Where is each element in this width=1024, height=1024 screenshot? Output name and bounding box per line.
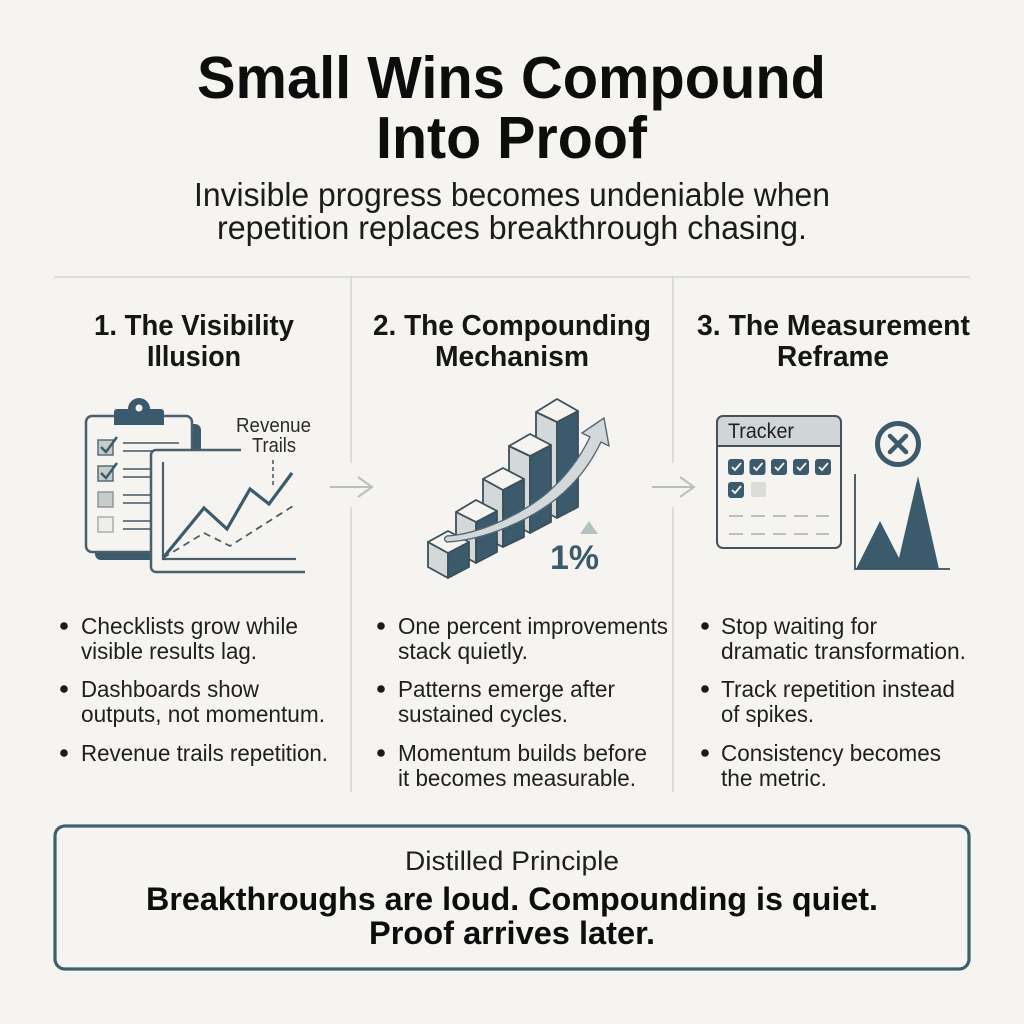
callout: distilled principle: Proof arrives later. (369, 915, 655, 951)
chart: spikes (855, 474, 950, 569)
heading: the visibility illusion: 1. The Visibility (94, 310, 294, 342)
bullet list: compounding: Momentum builds before (398, 740, 647, 766)
panel: the compounding mechanism (373, 310, 668, 791)
heading: the visibility illusion: Illusion (147, 341, 241, 373)
bullet list: compounding: One percent improvements (398, 613, 668, 639)
icon: habit tracker card: Tracker (728, 420, 794, 443)
arrow: column 1 to column 2 (330, 477, 372, 497)
bullet list: measurement: Stop waiting for (721, 613, 877, 639)
icon: clipboard checklist with revenue chart (86, 398, 311, 572)
heading: the compounding mechanism: 2. The Compounding (373, 310, 651, 342)
bullet list: compounding: sustained cycles. (398, 701, 568, 727)
bullet list: compounding (377, 613, 668, 791)
icon: rising isometric bars with arrow: 1% (550, 539, 599, 577)
heading: the compounding mechanism: Mechanism (435, 341, 589, 373)
subtitle: repetition replaces breakthrough chasing. (217, 209, 807, 246)
bullet list: measurement (701, 613, 966, 791)
heading: the compounding mechanism (373, 310, 651, 373)
subtitle (194, 176, 830, 246)
icon: crossed-out circle (878, 424, 918, 464)
bullet list: compounding: Patterns emerge after (398, 676, 615, 702)
callout: distilled principle: Distilled Principle (405, 846, 619, 876)
bullet list: measurement: of spikes. (721, 701, 814, 727)
heading: the visibility illusion (94, 310, 294, 373)
bullet list: visibility: outputs, not momentum. (81, 701, 325, 727)
title: Small Wins Compound (197, 45, 826, 111)
title: Into Proof (376, 105, 647, 171)
bullet list: measurement: dramatic transformation. (721, 638, 966, 664)
heading: the measurement reframe: Reframe (777, 341, 889, 373)
bullet list: visibility: Dashboards show (81, 676, 260, 702)
bullet list: compounding: it becomes measurable. (398, 765, 636, 791)
bullet list: compounding: stack quietly. (398, 638, 528, 664)
callout: distilled principle: Breakthroughs are loud. Compounding is quiet. (146, 881, 878, 917)
bullet list: visibility (60, 613, 328, 766)
bullet list: measurement: Consistency becomes (721, 740, 941, 766)
heading: the measurement reframe: 3. The Measurement (697, 310, 970, 342)
icon: clipboard checklist with revenue chart: Revenue (236, 415, 311, 437)
title (197, 45, 826, 171)
callout: distilled principle (55, 826, 969, 969)
panel: the measurement reframe (697, 310, 970, 791)
bullet list: visibility: Revenue trails repetition. (81, 740, 328, 766)
subtitle: Invisible progress becomes undeniable when (194, 176, 830, 213)
bullet list: measurement: Track repetition instead (721, 676, 955, 702)
heading: the measurement reframe (697, 310, 970, 373)
bullet list: visibility: Checklists grow while (81, 613, 298, 639)
bullet list: visibility: visible results lag. (81, 638, 257, 664)
panel: the visibility illusion (60, 310, 328, 766)
arrow: column 2 to column 3 (652, 477, 694, 497)
icon: clipboard checklist with revenue chart: Trails (252, 435, 296, 457)
icon: habit tracker card (717, 416, 841, 548)
icon: rising isometric bars with arrow (428, 399, 609, 578)
bullet list: measurement: the metric. (721, 765, 827, 791)
